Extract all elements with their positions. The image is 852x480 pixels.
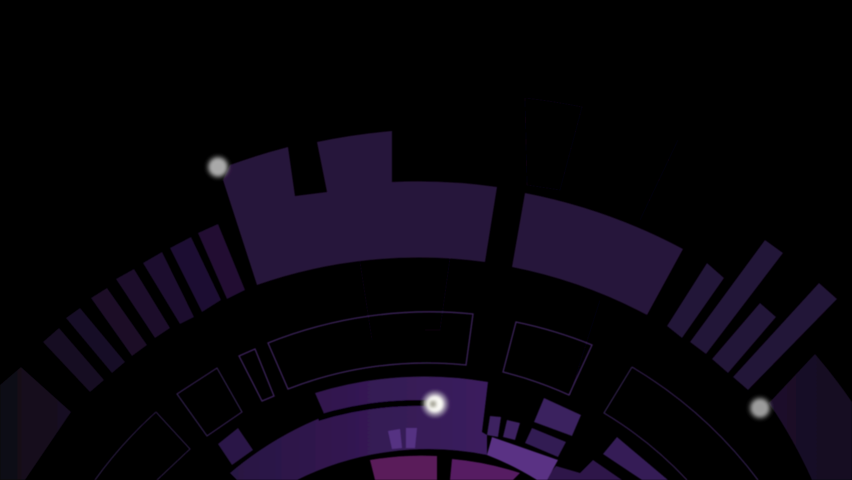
magenta core segment left <box>370 456 437 480</box>
node connector fade <box>424 400 432 406</box>
outer band: right arc panel <box>512 193 683 315</box>
outlined right segment <box>503 322 592 395</box>
small tabs right of ring <box>487 416 520 440</box>
outer band: notched arc panel <box>223 131 497 285</box>
right corner arc block <box>769 354 852 480</box>
small filled block lower-left <box>218 428 253 465</box>
bright arc block <box>487 437 558 480</box>
dim block under bright arc <box>545 460 622 480</box>
lower-right ring block upper <box>603 437 668 480</box>
outlined left square segment <box>177 368 242 436</box>
left tick bars <box>43 224 245 392</box>
dark gap arc leading to node <box>318 403 425 418</box>
graphic artwork <box>0 98 852 480</box>
outlined lower-left arc segment <box>95 412 190 480</box>
right tick bars <box>667 240 837 390</box>
outlined wide arc segment <box>268 312 473 389</box>
faint background wireframe lines <box>360 98 678 395</box>
outlined lower-right arc segment <box>604 367 758 480</box>
glow node right <box>748 396 772 420</box>
glow node top-left <box>206 155 230 179</box>
glow node center <box>422 391 448 417</box>
bright tabs above inner ring <box>388 428 417 449</box>
magenta core segment right <box>450 459 520 480</box>
left corner arc block <box>0 367 71 480</box>
right ring block upper <box>534 398 581 436</box>
right ring block lower <box>525 428 566 457</box>
purple inner ring <box>230 376 488 480</box>
outlined narrow segment <box>239 349 274 401</box>
